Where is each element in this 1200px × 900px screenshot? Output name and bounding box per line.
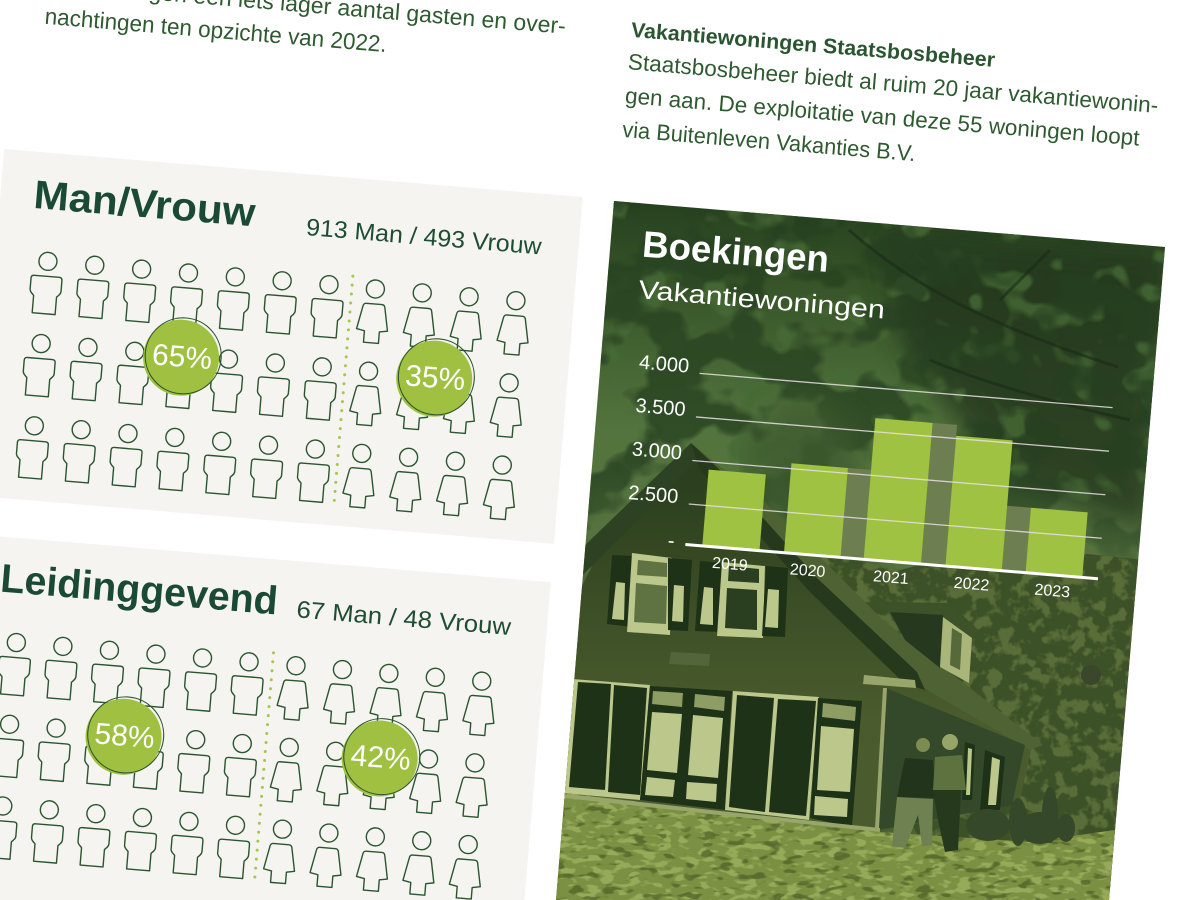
badge: 58%: 58% [93,717,156,755]
house: upper left window group [607,553,692,635]
panel background [0,534,551,900]
badge: 42% [339,715,423,800]
pictogram: men [0,632,265,879]
subheading: counts: 913 Man / 493 Vrouw [305,214,543,260]
house: side wing windows [962,742,1005,810]
photo: shrubs [966,787,1075,846]
photo: ground with fallen leaves [545,790,1120,900]
chart: y axis labels: 4.000 [638,352,690,378]
photo: trees behind the house [750,400,1150,900]
pictogram: men [15,251,345,503]
chart: y axis labels: 3.000 [631,438,683,465]
house: left double door [562,679,650,800]
chart: y axis labels: 3.500 [635,395,686,421]
chart: x axis labels: 2019 [711,555,748,575]
chart: y axis labels: - [667,530,675,553]
house: upper right window group [695,561,788,638]
house: drain pipe [875,688,887,828]
title: Boekingen: Boekingen [641,224,831,280]
photo background: sky and foliage tone [540,190,1200,900]
badge: 65%: 65% [151,338,213,376]
panel background [0,149,583,544]
photo: dark spot in the tree [1081,665,1101,685]
photo: branches [849,230,1130,420]
badge: 35% [393,336,477,420]
house: dormer [890,602,978,683]
chart: y axis labels: 2.500 [627,482,679,508]
badge: 58% [83,694,167,778]
chart: y axis labels [624,352,690,553]
heading: Leidinggevend: Leidinggevend [0,557,280,623]
bar chart: boekingen per jaar [622,352,1114,604]
badge: 42%: 42% [349,739,412,777]
house: left gable board [583,443,694,574]
text block: vakantiewoningen Staatsbosbeheer [621,19,1162,186]
chart: x axis labels: 2023 [1034,582,1071,601]
house: middle shutters [640,686,732,810]
subheading: counts: 67 Man / 48 Vrouw [296,596,513,641]
chart: grid lines [689,373,1113,538]
heading: Vakantiewoningen Staatsbosbeheer [630,19,996,72]
photo: dark canopy on the right [880,235,1170,530]
body line 1: Staatsbosbeheer biedt al ruim 20 jaar vakantiewonin- [627,49,1159,118]
photo: house [560,443,1043,832]
chart: x axis labels: 2020 [789,561,826,581]
house: right shutter [810,698,862,827]
badge: 35%: 35% [404,359,467,397]
badge: 65% [140,315,224,399]
subtitle: Vakantiewoningen: Vakantiewoningen [638,274,886,325]
text block: intro end [44,0,567,72]
house: side wing wall [878,688,1025,830]
photo: two people [892,734,966,852]
house: sign above doors [669,652,710,666]
house: right double door [725,691,819,820]
photo titles [638,224,890,325]
dotted divider [334,276,353,503]
panel: Leidinggevend [0,534,551,900]
chart: x axis [685,544,1098,579]
pictogram: women [342,279,532,520]
house: wall [560,450,1032,832]
body line 2: gen aan. De exploitatie van deze 55 woningen loopt [624,83,1141,151]
photo: vakantiewoning met bos [540,190,1200,900]
house: dark eave band [691,443,925,690]
chart: x axis labels [711,555,1071,601]
intro line 2: nachtingen ten opzichte van 2022. [44,3,388,57]
chart: x axis labels: 2021 [872,568,909,588]
chart: grey gaps between bars [841,416,1037,573]
body line 3: via Buitenleven Vakanties B.V. [621,117,916,166]
house: porch beam [863,675,916,688]
heading: Man/Vrouw: Man/Vrouw [32,173,258,235]
house: right roof [691,443,1043,750]
chart: x axis labels: 2022 [953,575,990,595]
chart: bars [702,405,1094,577]
pictogram: women [263,655,498,900]
dotted divider [255,653,273,879]
photo: leaves [582,201,1164,586]
panel: Man/Vrouw [0,149,583,544]
